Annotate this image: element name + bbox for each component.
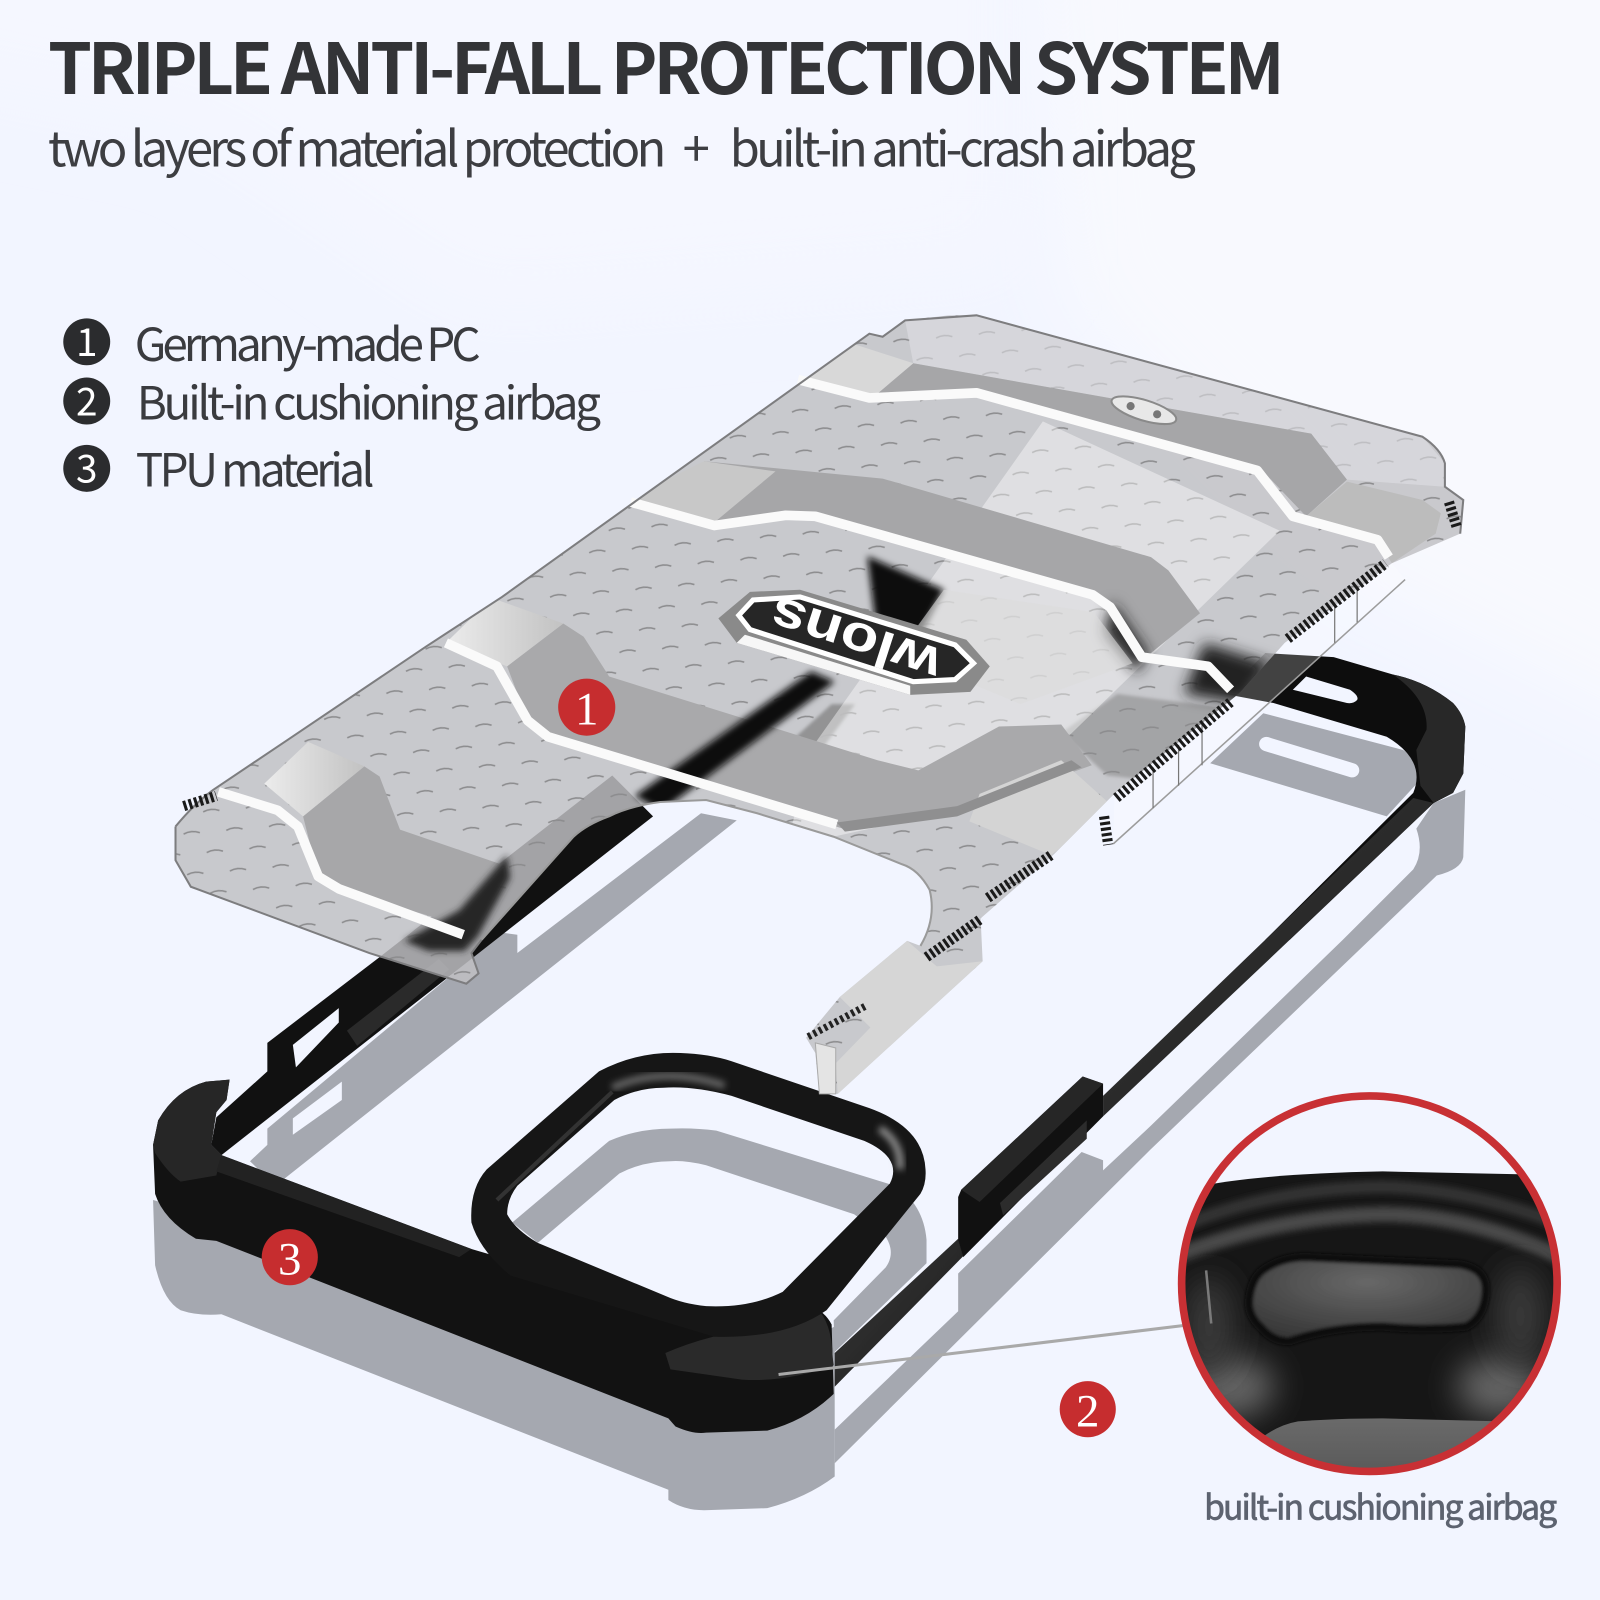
badge 2: 2 [1076, 1386, 1099, 1438]
dark body [1185, 1171, 1554, 1436]
serrated edges [184, 502, 1457, 957]
right rail lower [835, 1239, 963, 1387]
rear shadow zones seen through case [796, 693, 1222, 780]
camera ring [471, 1053, 926, 1337]
clear outer lip [1113, 563, 1405, 844]
band B corner block [660, 462, 776, 520]
PC clear case [153, 296, 1480, 1112]
light reflection [786, 421, 1280, 847]
magnified airbag callout [1178, 1092, 1561, 1476]
subtitle: two layers of material protection [48, 110, 666, 181]
airbag pill [1249, 1257, 1486, 1341]
legend list [63, 309, 601, 501]
TPU frame: bottom edge and corners [153, 1080, 834, 1433]
callout caption: built-in cushioning airbag [1204, 1480, 1557, 1529]
badge 1 [558, 679, 615, 736]
legend item 1: 1 [76, 312, 97, 368]
raised band C [507, 623, 1092, 829]
TPU frame: upper side and corner [211, 653, 1465, 1387]
bottom left corner cap [153, 1080, 230, 1182]
raised band A [873, 363, 1347, 516]
cutout edge [482, 800, 932, 946]
legend item 3: TPU material [136, 435, 374, 501]
callout leader line [779, 1326, 1184, 1374]
upper rim arcs [1173, 1187, 1561, 1230]
badge 2 [1060, 1381, 1116, 1438]
legend item 2: 2 [76, 371, 97, 427]
band A corner blocks [810, 345, 913, 393]
left rail with slot [211, 776, 653, 1155]
legend item 1: Germany-made PC [135, 309, 481, 375]
scale texture [153, 296, 1480, 1112]
clear window panel [918, 590, 1132, 700]
legend item 2: Built-in cushioning airbag [137, 367, 601, 433]
badge 3: 3 [278, 1233, 302, 1285]
white ridge lines [218, 380, 1389, 935]
top border zone [905, 315, 1445, 487]
right rail upper [1103, 798, 1434, 1116]
badge 3 [262, 1229, 318, 1285]
glow patches [1185, 1356, 1274, 1417]
top oval port [1109, 391, 1179, 430]
subtitle: built-in anti-crash airbag [730, 110, 1196, 181]
subtitle: + [683, 110, 710, 181]
lower band edge [837, 760, 1082, 832]
seam highlight [1206, 1270, 1211, 1323]
raised band D [303, 766, 499, 916]
case outline [176, 315, 1463, 984]
side button block [958, 1077, 1103, 1257]
legend item 3: 3 [76, 439, 97, 495]
dark through-case shadows [404, 556, 944, 951]
lower bump [1265, 1418, 1492, 1468]
subtitle [48, 110, 1196, 181]
bottom right corner cap [665, 1308, 834, 1380]
top frame band [1224, 653, 1465, 940]
case body [153, 296, 1480, 1112]
title: TRIPLE ANTI-FALL PROTECTION SYSTEM [48, 13, 1285, 115]
frame bevel [216, 1155, 471, 1257]
lower tab [808, 941, 983, 1094]
brand logo plate [718, 586, 990, 695]
brand logo plate: wlons [763, 586, 949, 694]
frame slot [1293, 677, 1358, 703]
cast shadow of frame [153, 713, 1465, 1510]
badge 1: 1 [575, 683, 598, 735]
corner cap [1393, 674, 1465, 803]
lower right block [969, 760, 1112, 855]
raised band B [704, 461, 1200, 657]
shadow slots [293, 735, 1361, 1135]
